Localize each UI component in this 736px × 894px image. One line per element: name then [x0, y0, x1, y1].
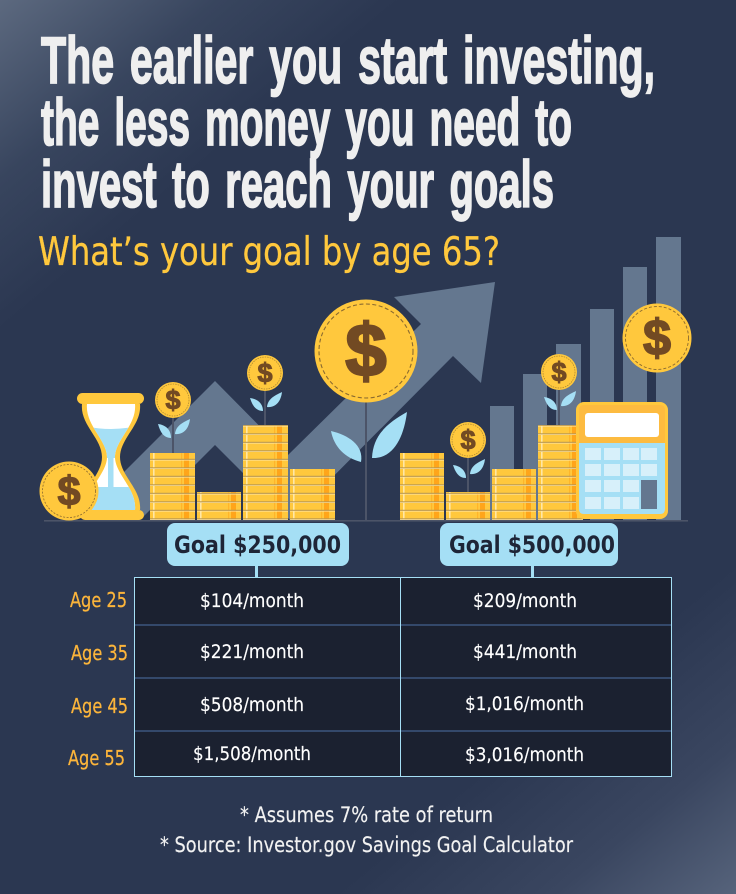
- goal label: $250,000: [167, 523, 349, 578]
- row: age 55: [68, 743, 584, 770]
- coin: plant 4: [541, 354, 577, 390]
- zigzag growth arrow: [104, 282, 495, 520]
- coin: plant 1: [155, 382, 191, 418]
- coin stacks, goal 250k: [150, 425, 335, 520]
- coin: plant 1: $: [165, 385, 181, 415]
- row: age 45: Age 45: [71, 694, 128, 718]
- row: age 55: $3,016/month: [465, 744, 584, 766]
- row: age 45: [71, 693, 584, 718]
- coin: plant 2: [247, 355, 283, 391]
- row: age 25: $209/month: [473, 590, 577, 612]
- coin: right: $: [643, 310, 671, 366]
- ground line: [44, 520, 688, 522]
- illustration: savings growth: [40, 237, 692, 522]
- goal label: $250,000: Goal $250,000: [174, 531, 341, 559]
- title: [41, 23, 655, 221]
- leaves: [158, 391, 576, 478]
- goal label: $500,000: Goal $500,000: [449, 531, 615, 559]
- coin: plant 3: $: [460, 425, 476, 455]
- row: age 35: [71, 641, 577, 665]
- subtitle: What’s your goal by age 65?: [38, 230, 500, 275]
- coin: large centre: [314, 300, 418, 402]
- coin: large centre: $: [345, 309, 387, 392]
- row: age 55: $1,508/month: [193, 743, 311, 765]
- row: age 35: $441/month: [473, 641, 577, 663]
- table: [68, 577, 672, 777]
- row: age 25: $104/month: [200, 590, 304, 612]
- row: age 45: $508/month: [200, 694, 304, 716]
- footnotes: [160, 803, 573, 857]
- footnotes: * Assumes 7% rate of return: [240, 803, 493, 827]
- coin: plant 3: [450, 422, 486, 458]
- coin: right: [622, 304, 692, 372]
- hourglass: [77, 393, 144, 520]
- coin stacks, goal 500k: [400, 425, 583, 520]
- background bar chart: [490, 237, 681, 520]
- footnotes: * Source: Investor.gov Savings Goal Calculator: [160, 833, 573, 857]
- coin: plant 4: $: [551, 357, 567, 387]
- row: age 45: $1,016/month: [465, 693, 584, 715]
- row: age 55: Age 55: [68, 746, 125, 770]
- row: age 25: Age 25: [70, 588, 127, 612]
- row: age 25: [70, 588, 577, 612]
- coin: plant 2: $: [257, 358, 273, 388]
- calculator: [576, 402, 668, 519]
- coin: left of hourglass: $: [58, 468, 81, 514]
- plant stems: [172, 390, 560, 520]
- coin: left of hourglass: [40, 462, 98, 520]
- row: age 35: $221/month: [200, 641, 304, 663]
- row: age 35: Age 35: [71, 641, 128, 665]
- goal label: $500,000: [440, 523, 618, 578]
